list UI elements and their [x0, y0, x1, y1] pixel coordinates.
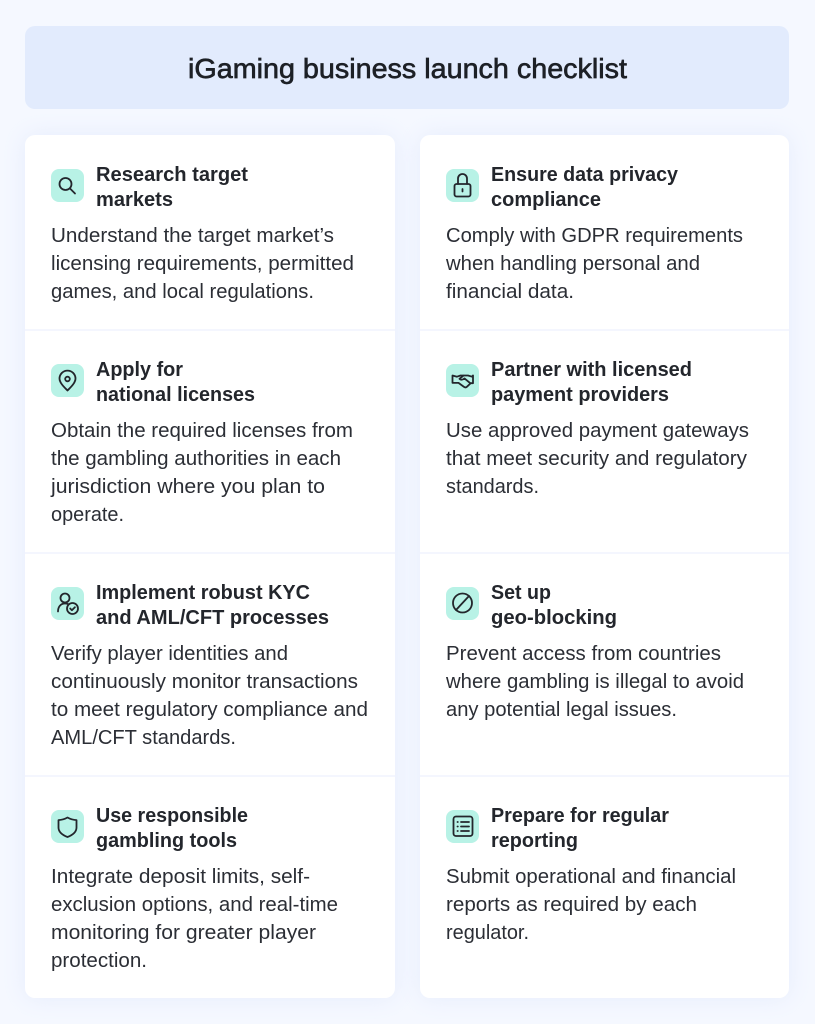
- heading: [96, 805, 248, 852]
- description: Obtain the required licenses from: [51, 420, 353, 442]
- description: when handling personal and: [445, 253, 700, 275]
- description: [51, 643, 368, 749]
- description: that meet security and regulatory: [446, 448, 747, 470]
- description: regulator.: [446, 922, 529, 944]
- icon: report list: [446, 810, 479, 843]
- description: standards.: [446, 476, 539, 498]
- item: data privacy compliance: [445, 164, 743, 303]
- panel: right checklist column: [420, 135, 789, 998]
- description: any potential legal issues.: [446, 699, 677, 721]
- item: geo-blocking: [445, 582, 744, 721]
- description: [51, 866, 338, 972]
- item: research target markets: [51, 164, 354, 303]
- item: regular reporting: [446, 805, 736, 944]
- heading: Ensure data privacy: [491, 164, 679, 186]
- heading: national licenses: [96, 384, 255, 406]
- icon: prohibited sign: [446, 587, 479, 620]
- heading: [491, 582, 617, 629]
- heading: [491, 805, 669, 852]
- item: KYC and AML/CFT: [51, 582, 368, 749]
- item: licensed payment providers: [446, 359, 749, 498]
- description: continuously monitor transactions: [51, 671, 358, 693]
- heading: [96, 359, 255, 406]
- icon: padlock: [446, 169, 479, 202]
- description: [446, 420, 749, 498]
- description: [51, 225, 354, 303]
- title: iGaming business launch checklist: [188, 53, 627, 84]
- description: Comply with GDPR requirements: [446, 225, 743, 247]
- item: responsible gambling tools: [51, 805, 338, 972]
- description: [50, 420, 353, 526]
- description: to meet regulatory compliance and: [51, 699, 368, 721]
- description: [445, 225, 743, 303]
- description: protection.: [51, 950, 147, 972]
- heading: Apply for: [96, 359, 183, 381]
- icon: location pin: [51, 364, 84, 397]
- description: AML/CFT standards.: [51, 727, 236, 749]
- description: Use approved payment gateways: [446, 420, 749, 442]
- heading: Partner with licensed: [491, 359, 692, 381]
- heading: Research target: [96, 164, 248, 186]
- description: games, and local regulations.: [51, 281, 314, 303]
- description: Prevent access from countries: [446, 643, 721, 665]
- heading: Implement robust KYC: [96, 582, 310, 604]
- description: jurisdiction where you plan to: [50, 476, 325, 498]
- icon: handshake: [446, 364, 479, 397]
- panel: left checklist column: [25, 135, 395, 998]
- description: [446, 866, 736, 944]
- description: Submit operational and financial: [446, 866, 736, 888]
- icon: shield: [51, 810, 84, 843]
- heading: Set up: [491, 582, 551, 604]
- heading: [491, 359, 692, 406]
- heading: gambling tools: [96, 830, 237, 852]
- description: licensing requirements, permitted: [51, 253, 354, 275]
- heading: and AML/CFT processes: [96, 607, 329, 629]
- heading: compliance: [491, 189, 601, 211]
- heading: geo-blocking: [491, 607, 617, 629]
- description: Integrate deposit limits, self-: [51, 866, 310, 888]
- heading: markets: [96, 189, 173, 211]
- heading: [96, 582, 329, 629]
- heading: reporting: [491, 830, 578, 852]
- heading: Use responsible: [96, 805, 248, 827]
- item: apply for national licenses: [50, 359, 353, 526]
- description: exclusion options, and real-time: [51, 894, 338, 916]
- heading: Prepare for regular: [491, 805, 669, 827]
- description: financial data.: [446, 281, 574, 303]
- description: the gambling authorities in each: [51, 448, 341, 470]
- heading: [491, 164, 679, 211]
- description: [445, 643, 744, 721]
- icon: user with check: [51, 587, 84, 620]
- description: Verify player identities and: [51, 643, 288, 665]
- heading: payment providers: [491, 384, 669, 406]
- description: operate.: [51, 504, 124, 526]
- description: where gambling is illegal to avoid: [445, 671, 744, 693]
- title banner: [25, 26, 789, 109]
- description: Understand the target market’s: [51, 225, 334, 247]
- icon: magnifying glass: [51, 169, 84, 202]
- description: reports as required by each: [446, 894, 697, 916]
- description: monitoring for greater player: [51, 922, 316, 944]
- heading: [96, 164, 248, 211]
